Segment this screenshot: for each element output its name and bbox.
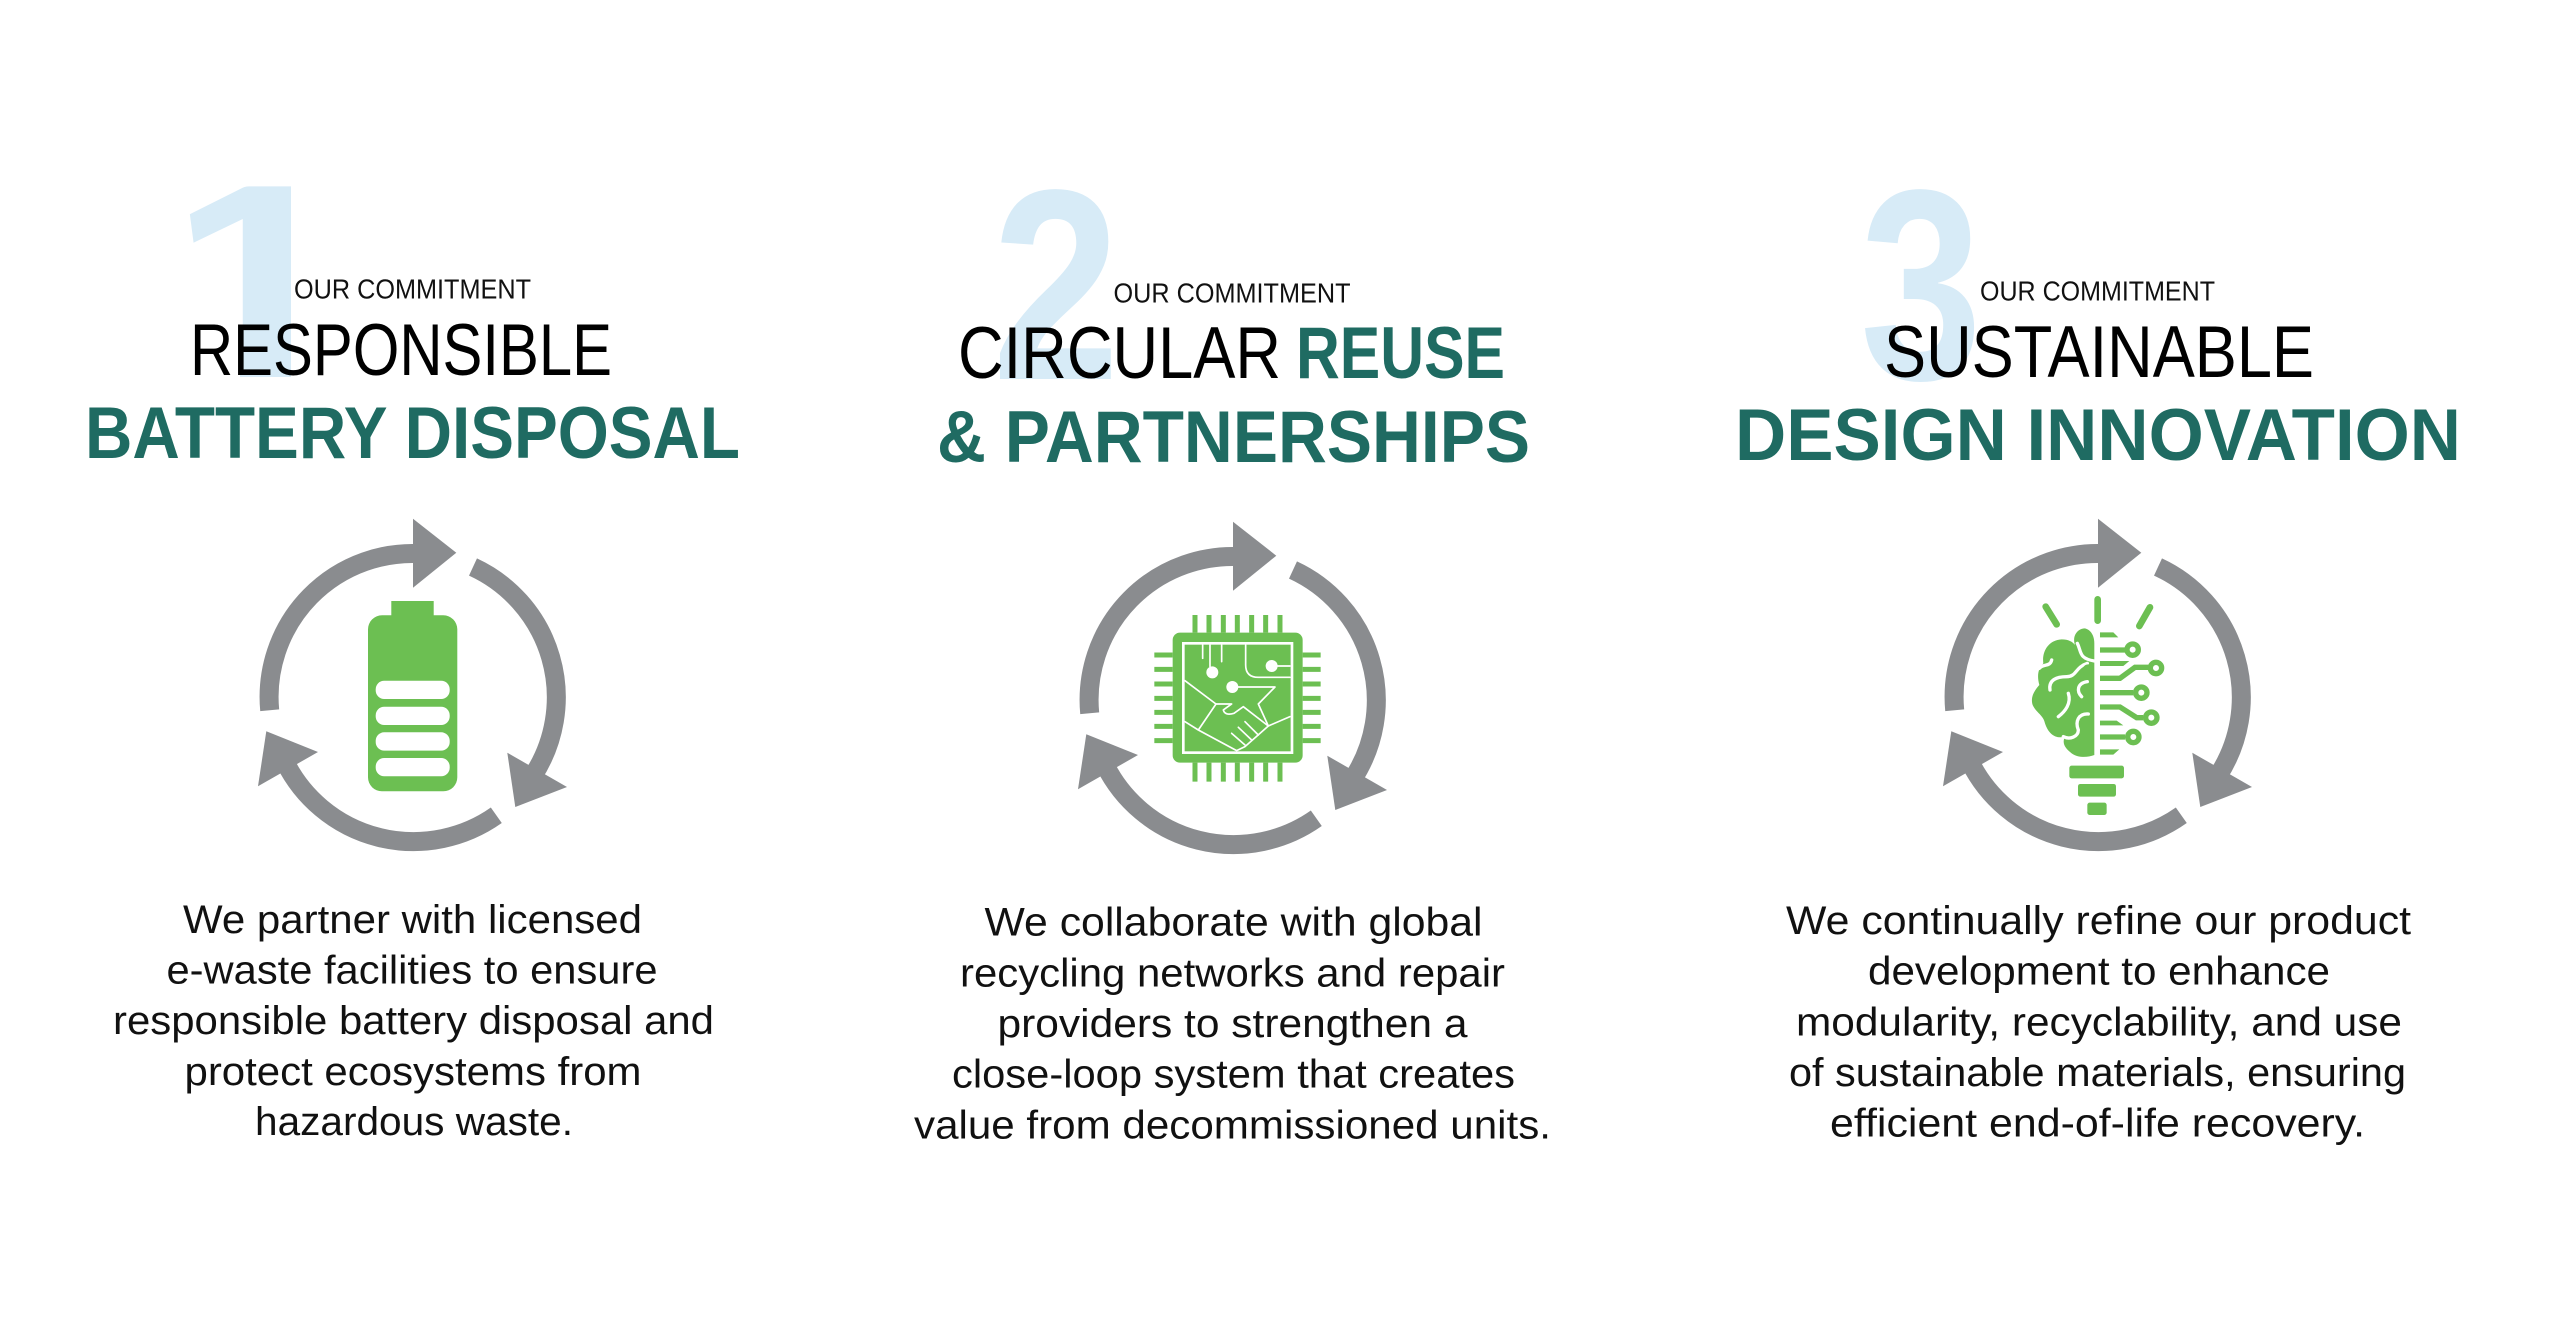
icon: recycling arrows with battery bbox=[258, 519, 567, 842]
body text bbox=[113, 898, 714, 1144]
body text: development to enhance bbox=[1868, 950, 2330, 994]
body text: hazardous waste. bbox=[255, 1100, 573, 1144]
body text: close-loop system that creates bbox=[952, 1052, 1515, 1096]
body text: modularity, recyclability, and use bbox=[1796, 1000, 2402, 1044]
number 1: 1 bbox=[158, 127, 360, 439]
body text: We collaborate with global bbox=[984, 900, 1482, 944]
heading: REUSE bbox=[1296, 313, 1505, 394]
body text: e-waste facilities to ensure bbox=[166, 949, 658, 993]
body text: responsible battery disposal and bbox=[113, 999, 714, 1043]
eyebrow: our commitment: OUR COMMITMENT bbox=[1980, 276, 2215, 306]
eyebrow: our commitment: OUR COMMITMENT bbox=[294, 274, 531, 304]
panel: sustainable design innovation bbox=[1735, 133, 2461, 1146]
heading: SUSTAINABLE bbox=[1884, 312, 2314, 393]
heading bbox=[937, 313, 1530, 478]
body text: recycling networks and repair bbox=[960, 952, 1505, 996]
heading bbox=[85, 310, 740, 474]
icon: recycling arrows with brain light bulb bbox=[1943, 519, 2252, 842]
body text: of sustainable materials, ensuring bbox=[1789, 1051, 2406, 1095]
body text bbox=[1786, 899, 2411, 1146]
heading: RESPONSIBLE bbox=[190, 310, 612, 391]
body text: efficient end-of-life recovery. bbox=[1830, 1102, 2365, 1146]
number 2: 2 bbox=[992, 133, 1120, 437]
body text: providers to strengthen a bbox=[998, 1002, 1468, 1046]
body text bbox=[914, 900, 1551, 1148]
heading: CIRCULAR bbox=[958, 313, 1281, 394]
heading: BATTERY DISPOSAL bbox=[85, 393, 740, 474]
panel: responsible battery disposal bbox=[85, 127, 740, 1144]
number 3: 3 bbox=[1860, 133, 1982, 437]
body text: We partner with licensed bbox=[183, 898, 642, 942]
eyebrow: our commitment: OUR COMMITMENT bbox=[1114, 278, 1350, 308]
icon: recycling arrows with circuit chip and handshake bbox=[1078, 522, 1387, 845]
panel: circular reuse and partnerships bbox=[914, 133, 1551, 1148]
body text: value from decommissioned units. bbox=[914, 1104, 1551, 1148]
heading: & PARTNERSHIPS bbox=[937, 397, 1530, 478]
heading bbox=[1735, 312, 2461, 476]
body text: We continually refine our product bbox=[1786, 899, 2411, 943]
body text: protect ecosystems from bbox=[184, 1050, 642, 1094]
heading: DESIGN INNOVATION bbox=[1735, 395, 2461, 476]
